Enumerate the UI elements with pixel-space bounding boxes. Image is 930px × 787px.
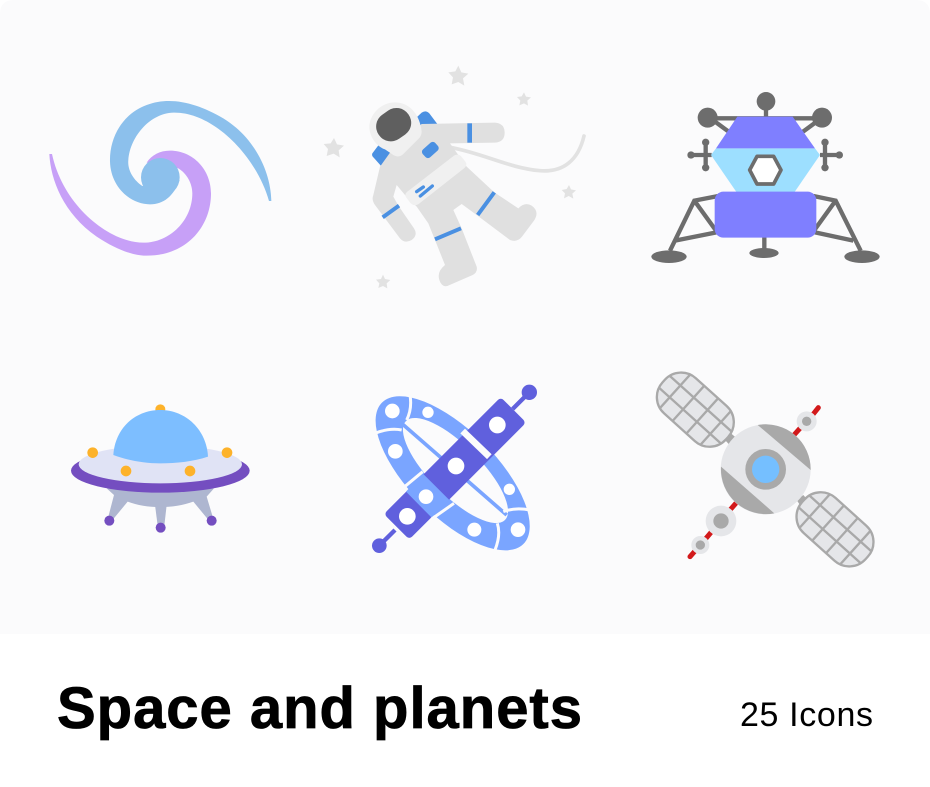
infographic canvas [49, 66, 880, 740]
icon: satellite [656, 371, 875, 568]
icon: flying saucer [71, 404, 250, 533]
icon count: 25 Icons [740, 696, 873, 734]
icon: space station [351, 372, 554, 575]
icon: spiral galaxy [49, 101, 271, 256]
icon: astronaut [324, 66, 584, 288]
icon: lunar lander [651, 92, 880, 263]
title: Space and planets [57, 676, 582, 741]
